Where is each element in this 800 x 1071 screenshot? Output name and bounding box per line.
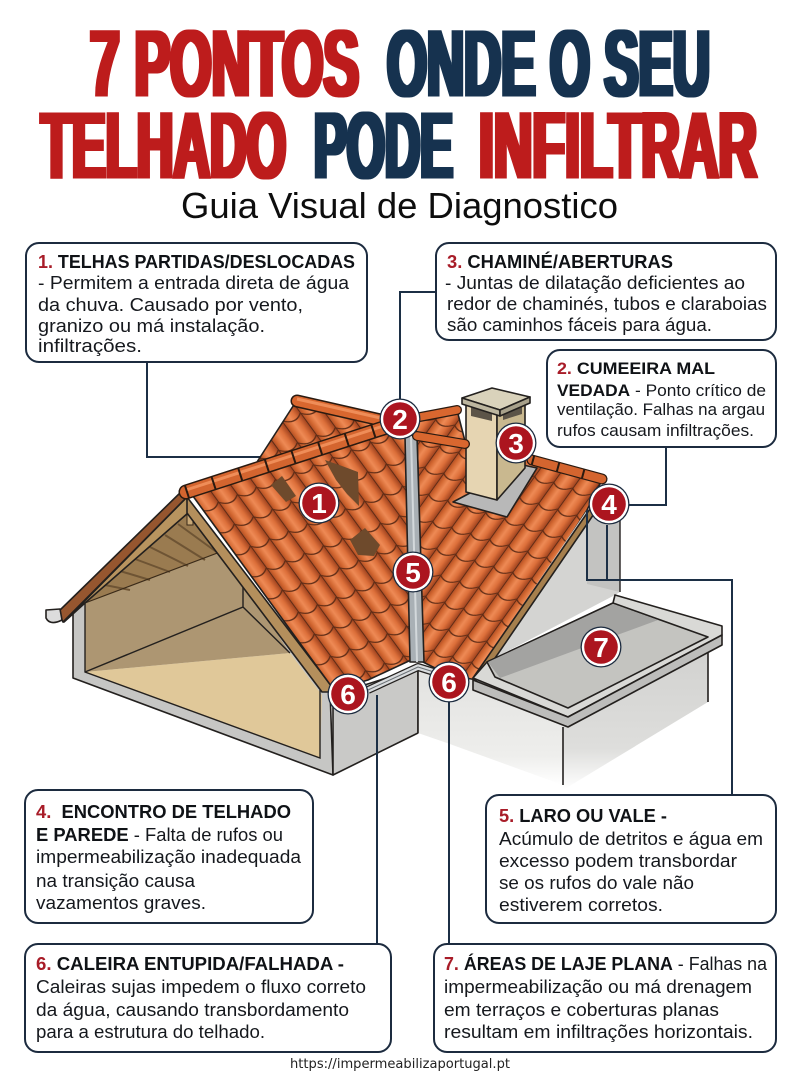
subtitle: Guia Visual de Diagnostico [181,185,618,226]
callout 1: telhas partidas: infiltrações. [38,336,142,356]
callout 4: encontro: na transição causa [36,871,196,891]
callout 1: telhas partidas: granizo ou má instalação. [38,316,265,336]
callout 5: laro: Acúmulo de detritos e água em [499,829,763,849]
title line 2 [41,93,757,199]
right lower wall left [333,668,418,775]
attic slats [85,510,222,603]
callout 2: cumeeira: rufos causam infiltrações. [557,421,754,440]
chimney flashing [453,465,537,517]
marker 7 [580,626,622,668]
flat roof right wall [563,652,708,790]
interior floor [85,653,322,758]
rear ridge [297,399,385,421]
callout 2: cumeeira: VEDADA - Ponto crítico de [557,381,766,400]
central lower wall [418,668,568,785]
side wall above flat roof [473,510,620,678]
callout 1: telhas partidas: 1. TELHAS PARTIDAS/DESLOCADAS [38,252,355,272]
marker 6 left [328,674,368,714]
marker 5: 5 [405,557,421,588]
callout 6: caleira: para a estrutura do telhado. [36,1022,265,1042]
flat roof surface [487,603,708,708]
callout 4: encontro: 4. ENCONTRO DE TELHADO [36,802,291,822]
left rafter [64,497,188,622]
callout 6: caleira: da água, causando transbordamento [36,1000,349,1020]
callout 7: laje plana: em terraços e coberturas planas [444,1000,719,1020]
gutter end [46,609,62,623]
callout 4: encontro: E PAREDE - Falta de rufos ou [36,825,283,845]
broken tile patches [271,460,380,556]
callout 1: telhas partidas: - Permitem a entrada direta de água [38,273,350,293]
marker 6 right: 6 [441,667,457,698]
callout 1: telhas partidas: da chuva. Causado por vento, [38,295,303,315]
flat roof lip front face [473,635,722,727]
callout 4: encontro: vazamentos graves. [36,893,206,913]
callout 6: caleira: 6. CALEIRA ENTUPIDA/FALHADA - [36,954,344,974]
rear roof [257,400,390,462]
callout 5: laro [486,795,776,923]
title line 1: 7 PONTOS [90,11,359,117]
marker 1: 1 [311,488,327,519]
callout 2: cumeeira [547,350,776,447]
callout 6: caleira: Caleiras sujas impedem o fluxo correto [36,977,366,997]
interior back walls [85,552,290,672]
marker 2: 2 [392,404,408,435]
connector lines behind the roof [147,292,435,457]
eave gutter [368,667,450,690]
marker 6 right [428,662,470,702]
callout 7: laje plana [434,944,776,1052]
right eave wood strip [473,506,598,680]
main ridge [186,420,402,492]
callout 1: telhas partidas [26,243,367,362]
title line 2: TELHADO [41,93,286,199]
marker 1 [298,482,340,524]
marker 4: 4 [601,489,617,520]
callout 5: laro: estiverem corretos. [499,895,663,915]
callout 3: chaminé [436,243,776,340]
callout 7: laje plana: impermeabilização ou má drenagem [444,977,752,997]
chimney [462,388,530,500]
valley flashing [405,436,424,662]
callout 5: laro: se os rufos do vale não [499,873,694,893]
right back ridge [417,410,465,444]
marker 4 [588,484,630,524]
front rafter [187,497,336,692]
right rear roof [415,410,466,445]
callout 2: cumeeira: ventilação. Falhas na argau [557,400,765,419]
flat roof lip [473,595,722,717]
callout 3: chaminé: redor de chaminés, tubos e claraboias [447,294,767,314]
right roof plane with tiles [417,432,603,680]
marker 3: 3 [508,428,524,459]
title line 2: PODE [314,93,453,199]
callout 6: caleira [25,944,391,1052]
marker 2 [380,398,420,440]
callout 3: chaminé: são caminhos fáceis para água. [447,315,712,335]
house illustration [46,388,722,790]
marker 3 [496,422,536,464]
connector lines over the house [377,448,732,944]
marker 7: 7 [593,632,609,663]
left section wall frame [73,510,333,775]
callout 5: laro: 5. LARO OU VALE - [499,806,667,826]
callout 3: chaminé: 3. CHAMINÉ/ABERTURAS [447,251,673,272]
callout 7: laje plana: resultam em infiltrações horizontais. [444,1022,753,1042]
callout 7: laje plana: 7. ÁREAS DE LAJE PLANA - Falhas na [444,953,768,974]
marker 5 [392,552,434,592]
right ridge [532,460,602,479]
callout 5: laro: excesso podem transbordar [499,851,737,871]
left roof plane with tiles [190,424,411,690]
callout 4: encontro: impermeabilização inadequada [36,847,302,867]
marker 6 left: 6 [340,679,356,710]
left edge of tile roof [58,490,187,622]
flat roof shaded band [488,604,658,678]
callout 3: chaminé: - Juntas de dilatação deficientes ao [445,273,745,293]
title [41,11,757,199]
callout 4: encontro [25,790,313,923]
callout 2: cumeeira: 2. CUMEEIRA MAL [557,359,715,378]
